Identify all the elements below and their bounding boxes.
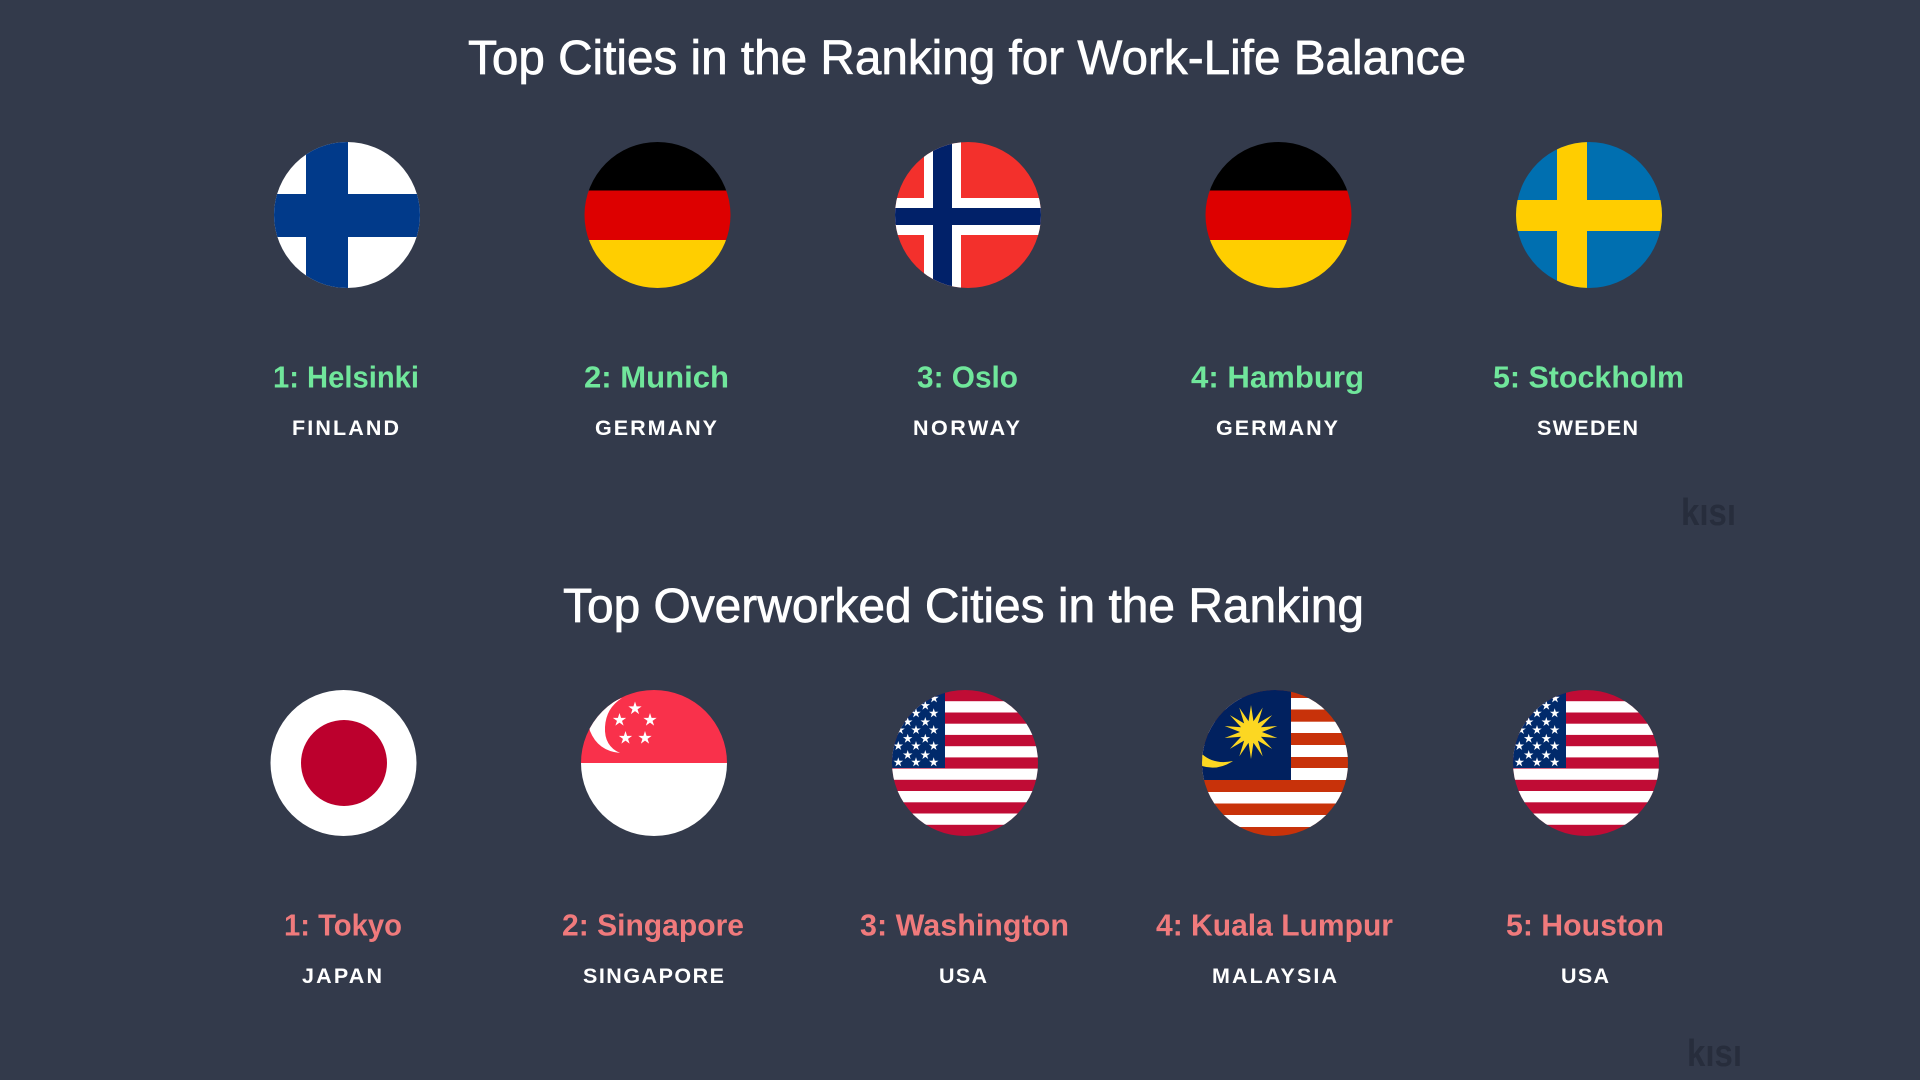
city: Oslo: 3: Oslo [917, 360, 1018, 394]
country: Norway: NORWAY [913, 416, 1020, 440]
city: Singapore: 2: Singapore [562, 908, 744, 942]
city: Tokyo: 1: Tokyo [284, 908, 402, 942]
card: Hamburg [1191, 142, 1364, 440]
icon: Malaysia flag [1202, 690, 1348, 836]
country: Japan: JAPAN [302, 964, 382, 988]
card: Washington [860, 690, 1069, 988]
card: Houston [1506, 690, 1664, 988]
icon: Sweden flag [1516, 142, 1662, 288]
icon: Norway flag [895, 142, 1041, 288]
icon: Japan flag [270, 690, 416, 836]
city: Hamburg: 4: Hamburg [1191, 360, 1364, 394]
country: USA: USA [939, 964, 987, 988]
city: Munich: 2: Munich [584, 360, 729, 394]
city: Stockholm: 5: Stockholm [1493, 360, 1684, 394]
card: Tokyo [270, 690, 416, 988]
country: Finland: FINLAND [292, 416, 399, 440]
icon: USA flag [892, 690, 1038, 836]
card: Munich [584, 142, 731, 440]
title: overworked cities: Top Overworked Cities in the Ranking [563, 580, 1364, 633]
country: Malaysia: MALAYSIA [1212, 964, 1337, 988]
icon: Germany flag [1205, 142, 1352, 288]
card: Singapore [562, 690, 744, 988]
card: Helsinki [273, 142, 420, 440]
panel: top overworked cities [270, 580, 1742, 1075]
title: work-life balance: Top Cities in the Ranking for Work-Life Balance [468, 32, 1466, 85]
panel: top cities for work-life balance [273, 32, 1736, 534]
country: USA: USA [1561, 964, 1609, 988]
icon: USA flag [1513, 690, 1659, 836]
city: Kuala Lumpur: 4: Kuala Lumpur [1156, 908, 1393, 942]
icon: Germany flag [584, 142, 731, 288]
city: Helsinki: 1: Helsinki [273, 360, 419, 394]
icon: Singapore flag [581, 690, 727, 836]
country: Germany: GERMANY [1216, 416, 1338, 440]
city: Houston: 5: Houston [1506, 908, 1664, 942]
card: Kuala Lumpur [1156, 690, 1393, 988]
card: Stockholm [1493, 142, 1684, 440]
country: Singapore: SINGAPORE [583, 964, 724, 988]
country: Sweden: SWEDEN [1537, 416, 1638, 440]
city: Washington: 3: Washington [860, 908, 1069, 942]
icon: Finland flag [274, 142, 420, 288]
logo: kisi: kısı [1687, 1033, 1742, 1075]
card: Oslo [895, 142, 1041, 440]
country: Germany: GERMANY [595, 416, 717, 440]
logo: kisi: kısı [1681, 492, 1736, 534]
